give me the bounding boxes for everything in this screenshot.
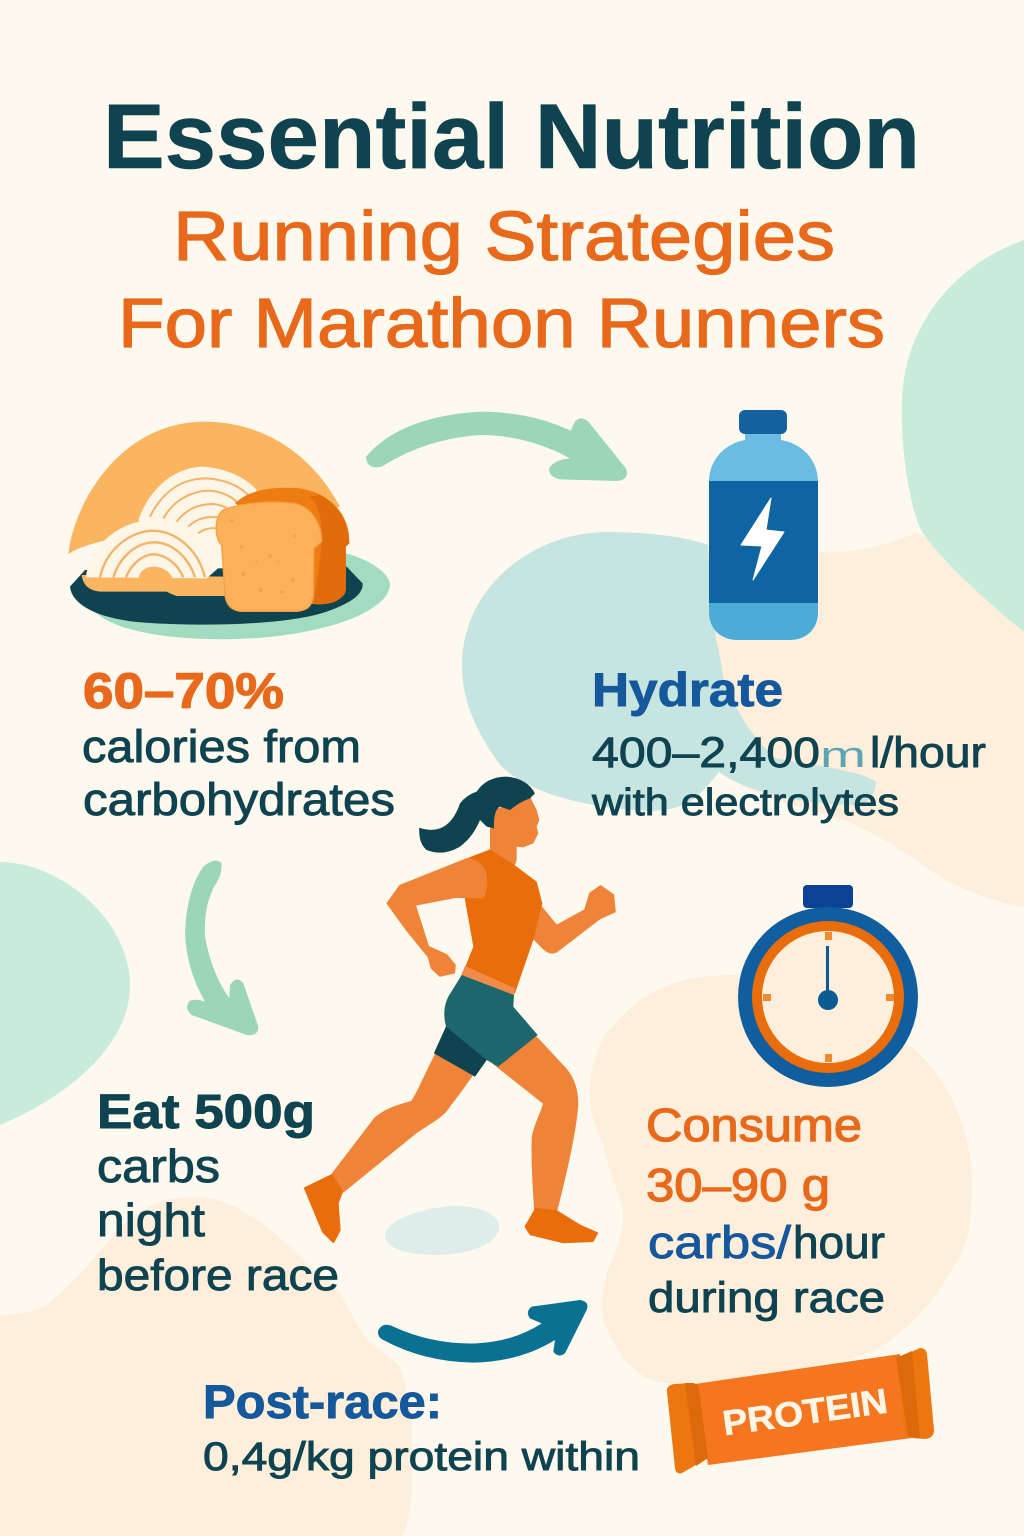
subtitle: Running Strategies: [173, 197, 835, 275]
text block: pre-race meal: [97, 1086, 339, 1300]
text block: during race: during race: [648, 1274, 885, 1322]
ponytail hair: [419, 777, 535, 853]
front arm: [387, 859, 486, 976]
stopwatch ticks: [763, 932, 894, 1062]
pasta front: [86, 520, 220, 578]
text block: hydrate: Hydrate: [592, 663, 783, 716]
subtitle: [118, 197, 885, 362]
orange top: [463, 849, 542, 993]
stopwatch hand: [818, 946, 838, 1010]
text block: post-race: 0,4g/kg protein within: [203, 1435, 640, 1479]
text block: carbohydrates: calories from: [82, 721, 361, 772]
runner figure: [305, 777, 615, 1255]
stopwatch body: [738, 907, 918, 1087]
text block: carbohydrates: 60–70%: [83, 663, 284, 719]
loaf crust: [235, 488, 349, 604]
bottle cap: [739, 410, 787, 434]
text block: carbohydrates: [82, 663, 395, 825]
shadow: [385, 1206, 499, 1255]
icon: stopwatch: [738, 885, 918, 1087]
icon: protein bar: [667, 1348, 934, 1473]
arrow: carbs to hydrate: [366, 412, 627, 481]
back leg: [332, 1047, 473, 1192]
text block: hydrate: l/hour: [870, 729, 986, 777]
text block: post-race: [203, 1375, 640, 1479]
title: Essential Nutrition: [103, 86, 920, 188]
text block: pre-race meal: before race: [97, 1251, 339, 1300]
loaf front slice: [216, 502, 322, 611]
bottle lower: [709, 603, 818, 640]
text block: during race: hour: [793, 1217, 885, 1268]
text block: pre-race meal: Eat 500g: [97, 1086, 315, 1139]
pasta back: [138, 467, 257, 567]
text block: hydrate: [591, 663, 986, 824]
icon: lightning bolt: [741, 498, 784, 580]
text block: hydrate: 400–2,400: [592, 729, 820, 777]
text block: during race: Consume: [646, 1099, 862, 1151]
text block: carbohydrates: carbohydrates: [83, 774, 395, 825]
text block: hydrate: with electrolytes: [591, 782, 899, 824]
icon: energy drink bottle: [709, 410, 818, 640]
subtitle: For Marathon Runners: [118, 284, 885, 362]
neck and face: [490, 797, 539, 868]
front leg: [493, 1023, 577, 1210]
stopwatch crown: [803, 885, 853, 908]
back shoe: [305, 1176, 342, 1242]
text block: hydrate: m: [820, 734, 866, 775]
icon: bread and pasta plate: [68, 422, 390, 639]
arrow: carbs to pre-race: [185, 861, 258, 1035]
front shoe: [526, 1209, 597, 1242]
back arm: [532, 886, 615, 953]
waist band: [461, 966, 515, 997]
text block: during race: 30–90 g: [646, 1159, 830, 1211]
bottle label: [709, 481, 818, 603]
shorts: [434, 975, 538, 1077]
pasta front base: [82, 575, 227, 596]
arrow: race to recovery: [378, 1300, 587, 1363]
bottle upper: [709, 433, 818, 482]
text block: pre-race meal: carbs: [97, 1140, 220, 1192]
protein label: PROTEIN: [720, 1382, 890, 1443]
orange dome: [68, 422, 340, 554]
plate: [70, 553, 390, 639]
text block: pre-race meal: night: [97, 1194, 205, 1246]
text block: during race: carbs/: [648, 1217, 792, 1268]
text block: during race: [646, 1099, 885, 1322]
text block: post-race: Post-race:: [203, 1375, 442, 1428]
